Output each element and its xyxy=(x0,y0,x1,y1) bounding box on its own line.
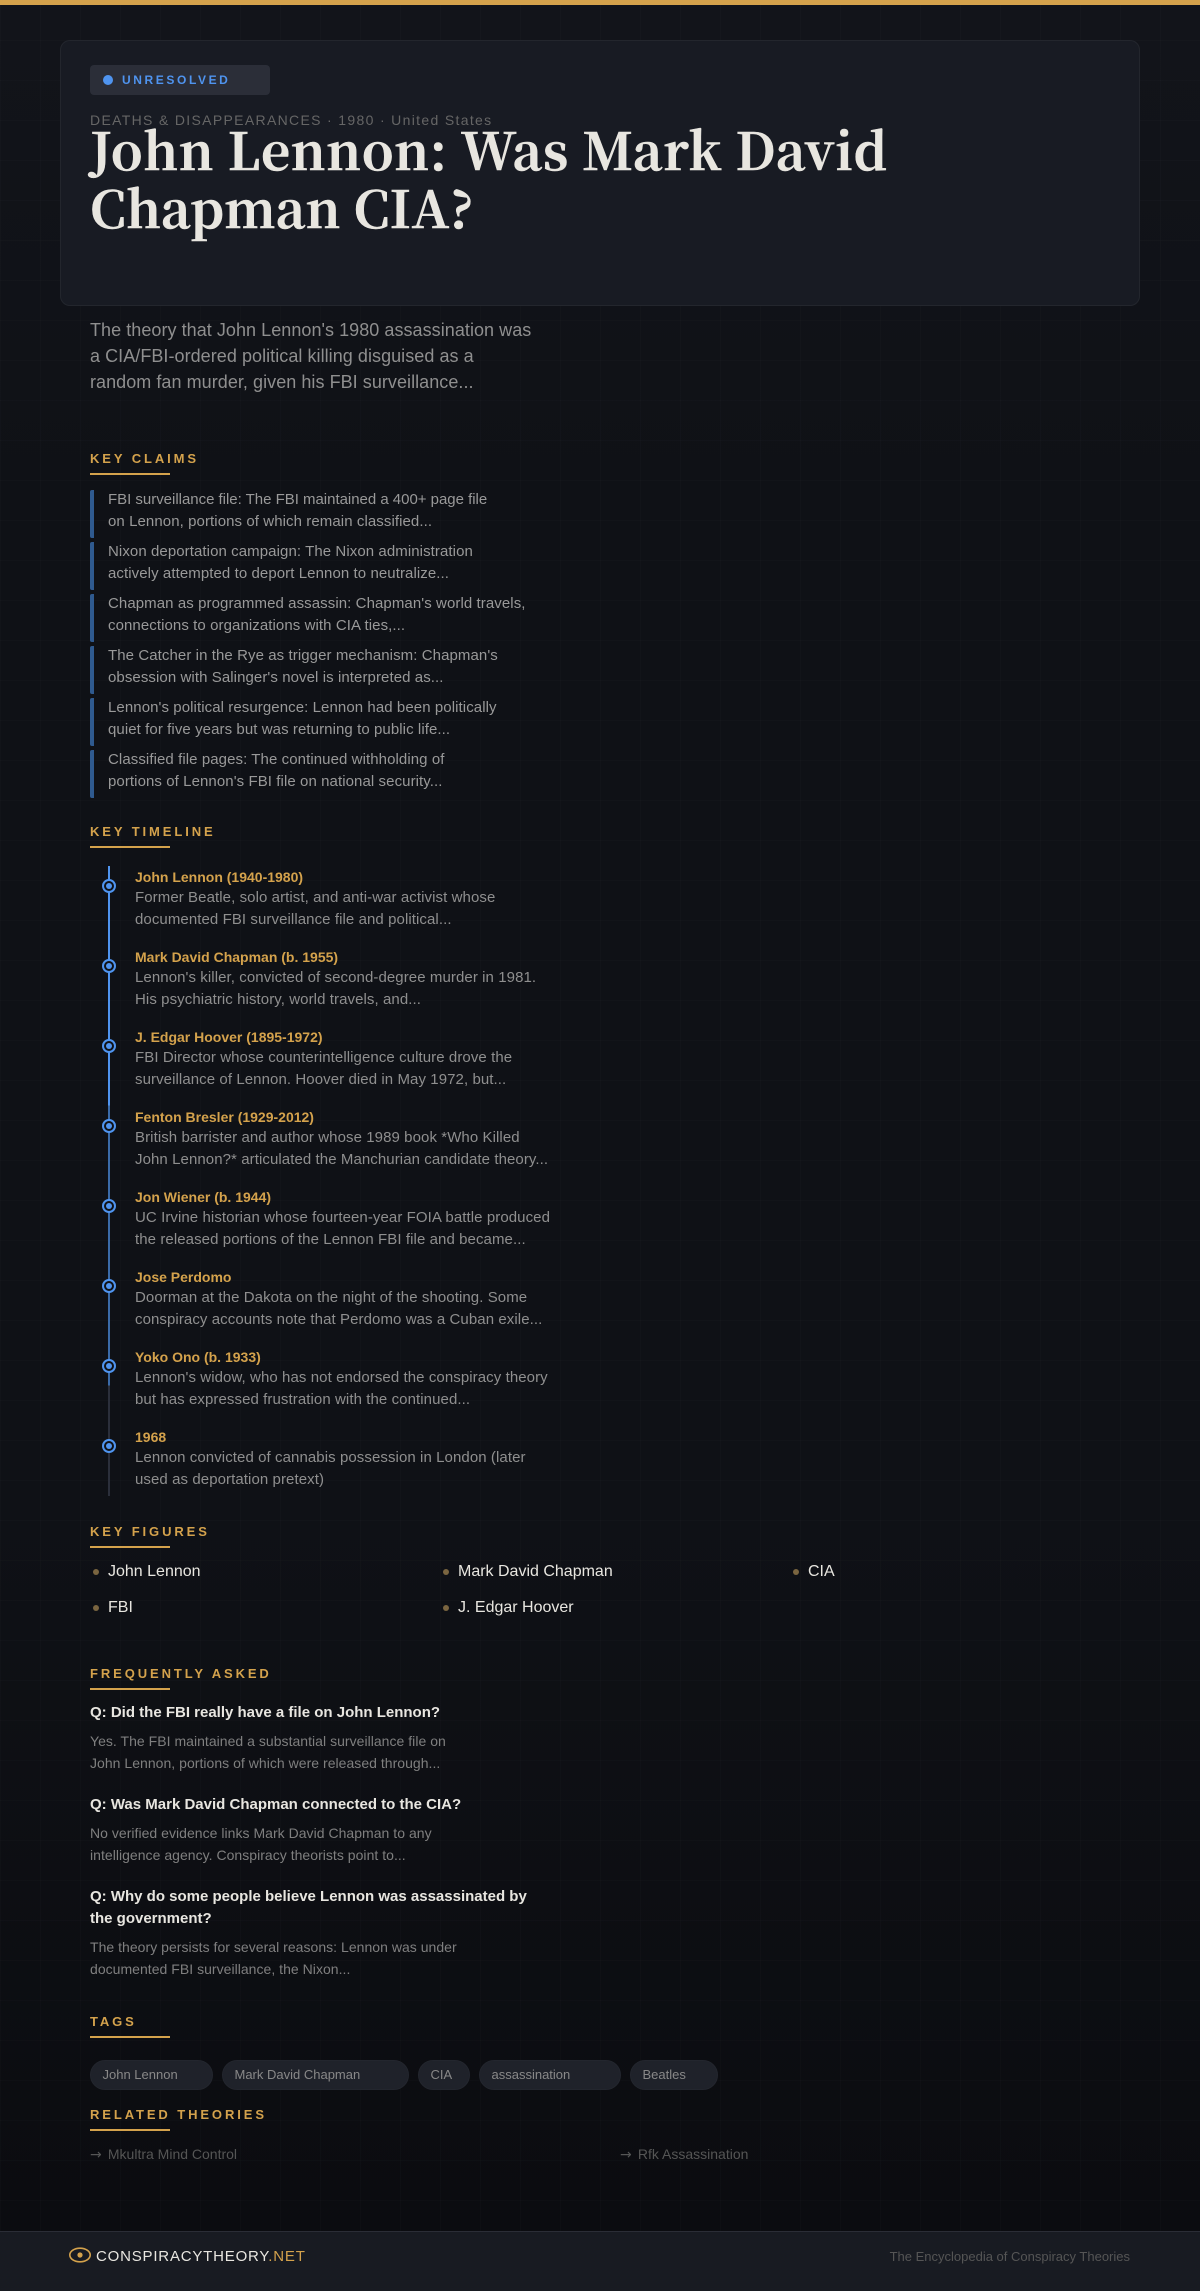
tag: Mark David Chapman: Mark David Chapman xyxy=(234,2067,360,2082)
claim 4: obsession with Salinger's novel is interpreted as... xyxy=(108,669,444,686)
timeline entry: Yoko Ono: but has expressed frustration with the continued... xyxy=(135,1391,470,1408)
tag: Mark David Chapman xyxy=(222,2060,409,2090)
timeline entry: Jose Perdomo: Jose Perdomo xyxy=(135,1269,231,1285)
heading: key timeline: KEY TIMELINE xyxy=(90,824,216,839)
category meta line: DEATHS & DISAPPEARANCES · 1980 · United States xyxy=(90,112,492,128)
faq 3: Q: Why do some people believe Lennon was assassinated by xyxy=(90,1888,527,1905)
timeline entry: J. Edgar Hoover: FBI Director whose counterintelligence culture drove the xyxy=(135,1049,512,1066)
timeline entry: Fenton Bresler xyxy=(135,1109,548,1168)
timeline entry: Mark David Chapman: His psychiatric history, world travels, and... xyxy=(135,991,421,1008)
figure: Mark David Chapman: Mark David Chapman xyxy=(458,1563,613,1580)
timeline entry: Jon Wiener xyxy=(135,1189,550,1248)
faq 2: Q: Was Mark David Chapman connected to the CIA? xyxy=(90,1796,461,1813)
top accent bar xyxy=(0,0,1200,5)
timeline entry: John Lennon: Former Beatle, solo artist, and anti-war activist whose xyxy=(135,889,495,906)
figure: CIA: CIA xyxy=(808,1563,835,1580)
tag list xyxy=(90,2060,718,2090)
timeline entry: Fenton Bresler: British barrister and author whose 1989 book *Who Killed xyxy=(135,1129,520,1146)
timeline entry: Jon Wiener: UC Irvine historian whose fourteen-year FOIA battle produced xyxy=(135,1209,550,1226)
timeline entry: Yoko Ono: Lennon's widow, who has not endorsed the conspiracy theory xyxy=(135,1369,548,1386)
icon: status dot xyxy=(103,75,113,85)
claim 5: quiet for five years but was returning to public life... xyxy=(108,721,450,738)
related link: Rfk Assassination: Rfk Assassination xyxy=(638,2146,748,2162)
node 5 xyxy=(102,1199,116,1213)
claim 2: Nixon deportation campaign: The Nixon administration xyxy=(108,543,473,560)
claim 2: actively attempted to deport Lennon to neutralize... xyxy=(108,565,449,582)
related link: Mkultra Mind Control: Mkultra Mind Control xyxy=(108,2146,237,2162)
timeline entry: Fenton Bresler: John Lennon?* articulated the Manchurian candidate theory... xyxy=(135,1151,548,1168)
figure: John Lennon: John Lennon xyxy=(108,1563,201,1580)
timeline entry: 1968: Lennon convicted of cannabis possession in London (later xyxy=(135,1449,526,1466)
timeline entry: 1968: 1968 xyxy=(135,1429,166,1445)
node 7 xyxy=(102,1359,116,1373)
panel: key figures list xyxy=(93,1563,835,1616)
tag: John Lennon: John Lennon xyxy=(102,2067,178,2082)
faq 3: the government? xyxy=(90,1910,212,1927)
panel: header xyxy=(60,40,1140,306)
timeline entry: John Lennon: John Lennon (1940-1980) xyxy=(135,869,303,885)
timeline spine xyxy=(108,866,110,1496)
summary text: The theory that John Lennon's 1980 assassination was xyxy=(90,320,531,340)
heading: related theories: RELATED THEORIES xyxy=(90,2107,267,2122)
faq 1: John Lennon, portions of which were released through... xyxy=(90,1755,440,1771)
timeline entry: Jose Perdomo: conspiracy accounts note that Perdomo was a Cuban exile... xyxy=(135,1311,542,1328)
heading: key claims: KEY CLAIMS xyxy=(90,451,199,466)
tag: CIA: CIA xyxy=(430,2067,452,2082)
faq 1: Yes. The FBI maintained a substantial surveillance file on xyxy=(90,1733,446,1749)
timeline entry: Yoko Ono xyxy=(135,1349,548,1408)
timeline entry: J. Edgar Hoover xyxy=(135,1029,512,1088)
node 1 xyxy=(102,879,116,893)
timeline entry: Jose Perdomo: Doorman at the Dakota on the night of the shooting. Some xyxy=(135,1289,527,1306)
heading: key figures: KEY FIGURES xyxy=(90,1524,210,1539)
claim 6: Classified file pages: The continued withholding of xyxy=(108,751,445,768)
tag: CIA xyxy=(418,2060,470,2090)
claim 6: portions of Lennon's FBI file on national security... xyxy=(108,773,443,790)
timeline entry: Mark David Chapman: Lennon's killer, convicted of second-degree murder in 1981. xyxy=(135,969,536,986)
faq 3 xyxy=(90,1888,527,1977)
timeline entry: Jose Perdomo xyxy=(135,1269,542,1328)
panel: key claims list xyxy=(90,490,526,798)
summary text xyxy=(90,320,531,392)
title xyxy=(88,111,888,243)
claim 4 xyxy=(90,646,550,694)
badge label: UNRESOLVED xyxy=(122,73,230,87)
claim 3: Chapman as programmed assassin: Chapman's world travels, xyxy=(108,595,526,612)
timeline entry: Fenton Bresler: Fenton Bresler (1929-2012) xyxy=(135,1109,314,1125)
timeline entry: Mark David Chapman xyxy=(135,949,536,1008)
claim 3: connections to organizations with CIA ties,... xyxy=(108,617,405,634)
title: John Lennon: Was Mark David xyxy=(90,111,888,185)
heading: frequently asked: FREQUENTLY ASKED xyxy=(90,1666,272,1681)
claim 4: The Catcher in the Rye as trigger mechanism: Chapman's xyxy=(108,647,498,664)
tag: assassination xyxy=(479,2060,621,2090)
faq 2: intelligence agency. Conspiracy theorists point to... xyxy=(90,1847,406,1863)
site name: CONSPIRACYTHEORY.NET xyxy=(96,2248,306,2265)
timeline entry: Mark David Chapman: Mark David Chapman (b. 1955) xyxy=(135,949,338,965)
timeline entry: 1968: used as deportation pretext) xyxy=(135,1471,324,1488)
figure: FBI xyxy=(93,1599,133,1616)
footer xyxy=(0,2231,1200,2291)
timeline entry: Jon Wiener: the released portions of the Lennon FBI file and became... xyxy=(135,1231,526,1248)
timeline entry: 1968 xyxy=(135,1429,526,1488)
tagline: The Encyclopedia of Conspiracy Theories xyxy=(890,2249,1130,2264)
claim 5: Lennon's political resurgence: Lennon had been politically xyxy=(108,699,497,716)
claim 2 xyxy=(90,542,550,590)
title: Chapman CIA? xyxy=(90,169,474,243)
faq 1 xyxy=(90,1704,446,1771)
claim 1: FBI surveillance file: The FBI maintained a 400+ page file xyxy=(108,491,487,508)
claim 1: on Lennon, portions of which remain classified... xyxy=(108,513,432,530)
faq 1: Q: Did the FBI really have a file on John Lennon? xyxy=(90,1704,440,1721)
status badge: unresolved xyxy=(90,65,270,95)
figure: J. Edgar Hoover: J. Edgar Hoover xyxy=(458,1599,574,1616)
timeline entry: John Lennon xyxy=(135,869,495,928)
heading: tags: TAGS xyxy=(90,2014,137,2029)
figure: FBI: FBI xyxy=(108,1599,133,1616)
tag: Beatles: Beatles xyxy=(642,2067,686,2082)
summary text: a CIA/FBI-ordered political killing disguised as a xyxy=(90,346,474,366)
node 8 xyxy=(102,1439,116,1453)
node 2 xyxy=(102,959,116,973)
timeline entry: J. Edgar Hoover: J. Edgar Hoover (1895-1972) xyxy=(135,1029,323,1045)
claim 5 xyxy=(90,698,550,746)
timeline entry: J. Edgar Hoover: surveillance of Lennon. Hoover died in May 1972, but... xyxy=(135,1071,506,1088)
faq 3: documented FBI surveillance, the Nixon... xyxy=(90,1961,350,1977)
figure: CIA xyxy=(793,1563,835,1580)
timeline xyxy=(102,866,550,1496)
summary text: random fan murder, given his FBI surveillance... xyxy=(90,372,474,392)
node 6 xyxy=(102,1279,116,1293)
claim 1 xyxy=(90,490,550,538)
tag: Beatles xyxy=(630,2060,718,2090)
node 3 xyxy=(102,1039,116,1053)
timeline entry: Jon Wiener: Jon Wiener (b. 1944) xyxy=(135,1189,271,1205)
claim 3 xyxy=(90,594,550,642)
faq 3: The theory persists for several reasons: Lennon was under xyxy=(90,1939,457,1955)
tag: assassination: assassination xyxy=(492,2067,570,2082)
tag: John Lennon xyxy=(90,2060,213,2090)
related link: Mkultra Mind Control: → xyxy=(90,2147,102,2163)
related link: Rfk Assassination: → xyxy=(620,2147,632,2163)
icon: eye logo xyxy=(69,2247,91,2263)
timeline entry: Yoko Ono: Yoko Ono (b. 1933) xyxy=(135,1349,261,1365)
timeline entry: John Lennon: documented FBI surveillance file and political... xyxy=(135,911,452,928)
claim 6 xyxy=(90,750,550,798)
faq 2: No verified evidence links Mark David Chapman to any xyxy=(90,1825,432,1841)
node 4 xyxy=(102,1119,116,1133)
faq 2 xyxy=(90,1796,461,1863)
